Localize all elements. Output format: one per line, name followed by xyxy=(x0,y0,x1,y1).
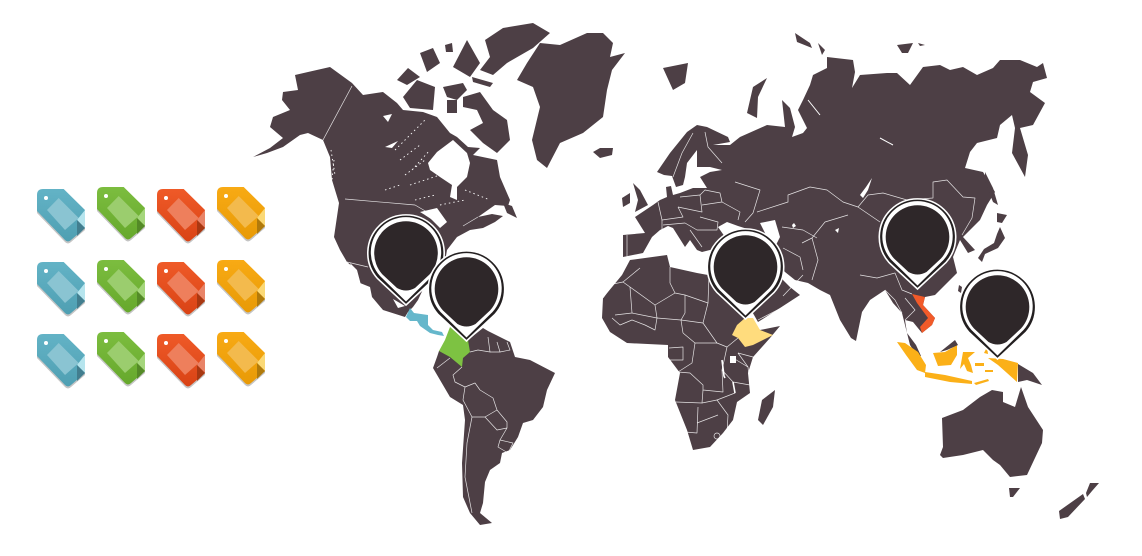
map pin: Colombia xyxy=(428,251,505,341)
South America xyxy=(433,328,555,525)
Tasmania xyxy=(1009,488,1020,497)
tag: green row 2 xyxy=(97,260,145,314)
Africa xyxy=(602,255,780,450)
tag: green row 1 xyxy=(97,187,145,242)
tag: blue row 1 xyxy=(37,189,85,244)
Eurasia xyxy=(623,57,1047,356)
tags grid xyxy=(37,187,265,388)
Borneo north and Papua New Guinea xyxy=(940,340,1042,385)
tag: blue row 2 xyxy=(37,262,85,316)
tag: blue row 3 xyxy=(37,334,85,388)
map pin: Vietnam xyxy=(879,199,956,289)
highlighted country: Ethiopia xyxy=(732,318,773,347)
North America xyxy=(253,67,517,317)
map pin: Indonesia xyxy=(959,269,1036,359)
map pin: Ethiopia xyxy=(707,229,784,319)
highlighted country: Vietnam xyxy=(912,294,935,333)
tag: green row 3 xyxy=(97,332,145,386)
New Zealand xyxy=(1059,483,1099,519)
tag: red row 3 xyxy=(157,334,205,388)
world map xyxy=(253,23,1099,525)
tag: red row 1 xyxy=(157,189,205,244)
Australia xyxy=(940,387,1043,477)
map pin: Central America xyxy=(368,215,444,305)
highlighted country: Indonesia xyxy=(897,342,1018,385)
highlighted country: Colombia xyxy=(439,327,470,367)
tag: orange row 1 xyxy=(217,187,265,242)
Greenland xyxy=(517,33,625,168)
European and Asian islands xyxy=(622,33,1007,293)
Madagascar xyxy=(758,390,775,425)
highlighted region: Central America xyxy=(406,308,444,336)
tag: orange row 2 xyxy=(217,260,265,314)
tag: orange row 3 xyxy=(217,332,265,386)
Iceland xyxy=(593,148,613,158)
tag: red row 2 xyxy=(157,262,205,316)
Canadian Arctic islands xyxy=(397,23,550,153)
